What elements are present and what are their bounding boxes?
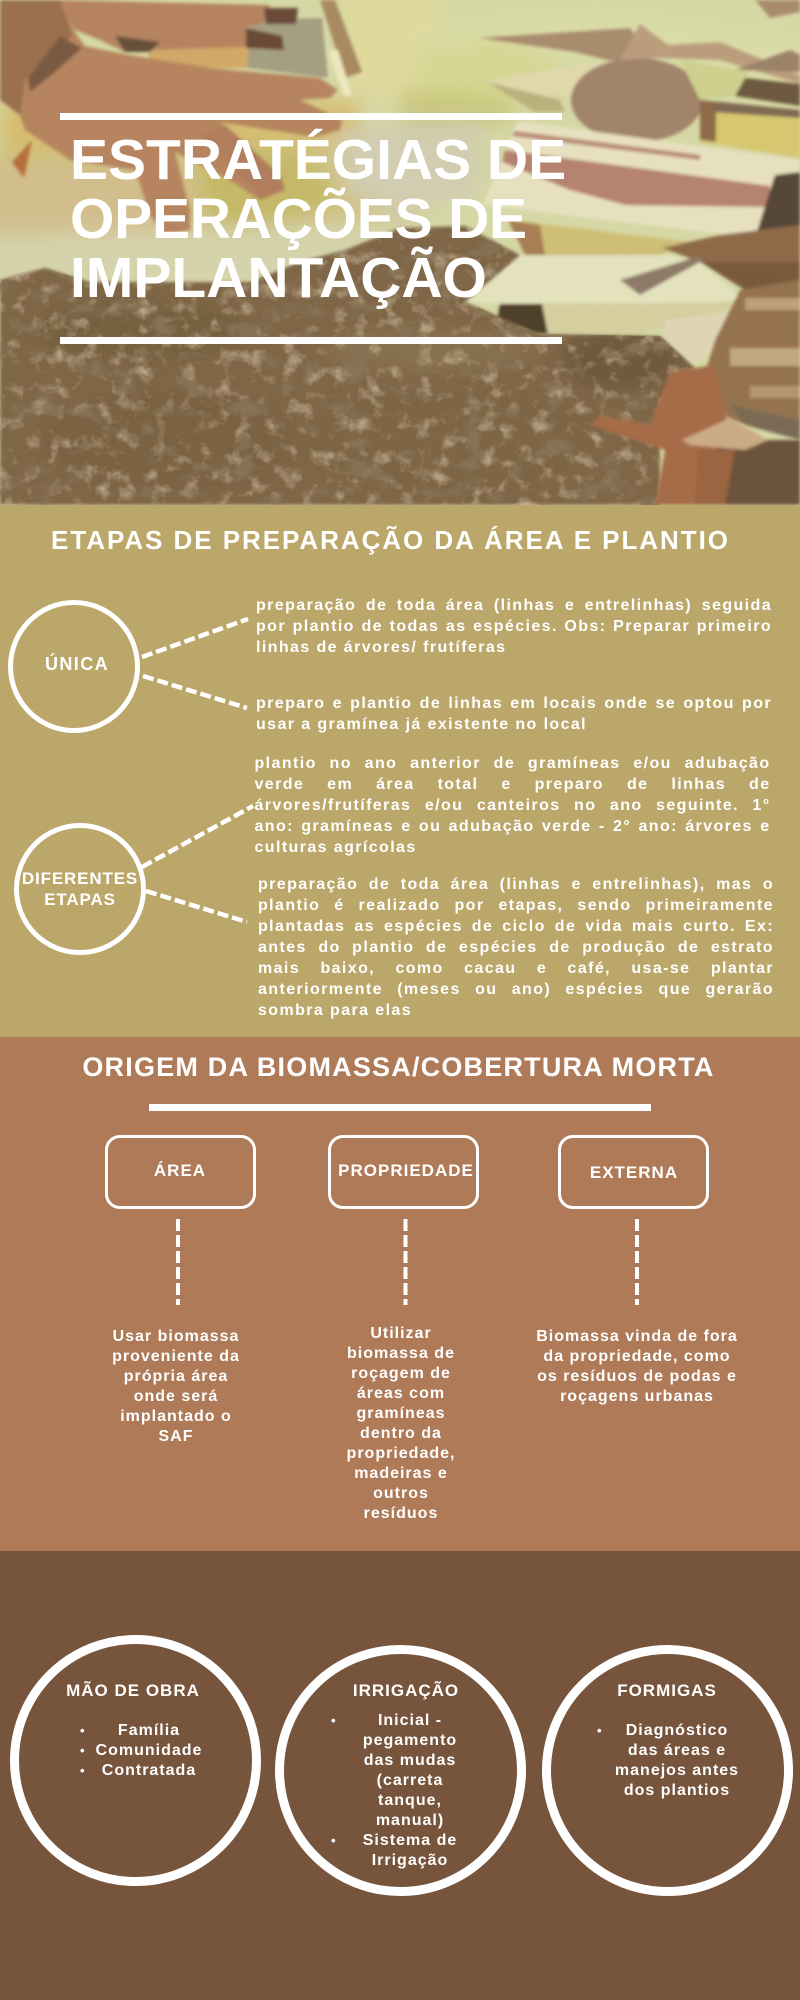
palm trunk bbox=[700, 280, 800, 440]
text: externa: roçagens urbanas bbox=[560, 1388, 714, 1405]
list: irrigação: Irrigação bbox=[372, 1852, 448, 1869]
text: propriedade: dentro da bbox=[360, 1425, 442, 1442]
text: área: SAF bbox=[158, 1428, 194, 1445]
text: propriedade: Utilizar bbox=[370, 1325, 432, 1342]
dashed connectors bbox=[141, 616, 254, 924]
lower stem bbox=[465, 255, 745, 303]
list: formigas: Diagnóstico bbox=[626, 1722, 728, 1739]
text: propriedade: roçagem de bbox=[351, 1365, 451, 1382]
title: ESTRATÉGIAS DE bbox=[70, 128, 566, 192]
red fibers bbox=[590, 365, 735, 505]
text: preparação por etapas: anteriormente (meses ou ano) espécies que gerarão bbox=[258, 981, 774, 998]
circle: única bbox=[8, 600, 140, 733]
text: propriedade: resíduos bbox=[364, 1505, 438, 1522]
list: irrigação: (carreta bbox=[377, 1772, 443, 1789]
list: irrigação: pegamento bbox=[363, 1732, 457, 1749]
label: externa: EXTERNA bbox=[590, 1163, 678, 1182]
bullets: irrigação bbox=[331, 1713, 336, 1848]
list: mão de obra bbox=[96, 1722, 202, 1779]
title bbox=[70, 128, 566, 310]
text: externa: Biomassa vinda de fora bbox=[536, 1328, 738, 1345]
list: mão de obra: Comunidade bbox=[96, 1742, 202, 1759]
striped stem bbox=[483, 121, 800, 240]
text: preparação por etapas: mais baixo, como cacau e café, usa-se plantar bbox=[258, 960, 774, 977]
panel: mão de obra, irrigação, formigas bbox=[0, 1551, 800, 2000]
bullets: irrigação: • bbox=[331, 1713, 336, 1728]
list: formigas: dos plantios bbox=[624, 1782, 730, 1799]
text: preparação de toda área: por plantio de todas as espécies. Obs: Preparar primeiro bbox=[256, 618, 772, 635]
heading: etapas: ETAPAS DE PREPARAÇÃO DA ÁREA E PLANTIO bbox=[51, 525, 730, 555]
title bottom rule bbox=[60, 337, 562, 344]
heading rule bbox=[149, 1104, 651, 1111]
circle: mão de obra bbox=[10, 1635, 261, 1886]
circle: diferentes etapas bbox=[14, 823, 146, 955]
title top rule bbox=[60, 113, 562, 120]
text: preparação por etapas bbox=[258, 876, 774, 1019]
label: única: ÚNICA bbox=[45, 654, 109, 674]
soft leaf background bbox=[0, 100, 360, 160]
text: preparação por etapas: plantio é realizado por etapas, sendo primeiramente bbox=[258, 897, 774, 914]
text: plantio no ano anterior: culturas agrícolas bbox=[254, 839, 417, 856]
text: propriedade: gramíneas bbox=[356, 1405, 446, 1422]
list: irrigação: das mudas bbox=[364, 1752, 456, 1769]
text: preparação por etapas: sombra para elas bbox=[258, 1002, 412, 1019]
text: propriedade: madeiras e bbox=[354, 1465, 448, 1482]
text: preparação por etapas: antes do plantio de espécies de produção de estrato bbox=[258, 939, 774, 956]
text: plantio no ano anterior: plantio no ano anterior de gramíneas e/ou adubação bbox=[254, 755, 770, 772]
text: preparação de toda área bbox=[256, 597, 772, 656]
panel: etapas de preparação bbox=[0, 505, 800, 1037]
text: plantio no ano anterior bbox=[254, 755, 770, 856]
heading: mão de obra: MÃO DE OBRA bbox=[66, 1681, 200, 1700]
text: externa: da propriedade, como bbox=[543, 1348, 731, 1365]
text: preparo e plantio de linhas bbox=[256, 695, 772, 733]
text: preparação de toda área: preparação de toda área (linhas e entrelinhas) seguida bbox=[256, 597, 772, 614]
text: propriedade: biomassa de bbox=[347, 1345, 455, 1362]
hands bbox=[58, 0, 282, 52]
dark object at end of stem bbox=[755, 172, 800, 238]
broken fibers bbox=[662, 225, 800, 262]
label: diferentes etapas: DIFERENTES bbox=[22, 869, 138, 888]
list: irrigação: tanque, bbox=[378, 1792, 442, 1809]
bullet: formigas: • bbox=[597, 1723, 602, 1738]
text: propriedade: outros bbox=[373, 1485, 429, 1502]
bullets: mão de obra: • bbox=[80, 1763, 85, 1778]
panel: hero photo with title bbox=[0, 0, 800, 505]
text: preparação por etapas: preparação de toda área (linhas e entrelinhas), mas o bbox=[258, 876, 774, 893]
text: área: proveniente da bbox=[112, 1348, 240, 1365]
list: formigas bbox=[615, 1722, 739, 1799]
label: propriedade: PROPRIEDADE bbox=[338, 1161, 474, 1180]
circle: irrigação bbox=[275, 1645, 526, 1896]
list: formigas: das áreas e bbox=[628, 1742, 726, 1759]
heading: origem da biomassa: ORIGEM DA BIOMASSA/COBERTURA MORTA bbox=[82, 1052, 715, 1082]
heading: irrigação: IRRIGAÇÃO bbox=[353, 1681, 459, 1700]
text: propriedade: áreas com bbox=[357, 1385, 445, 1402]
text: área: implantado o bbox=[120, 1408, 232, 1425]
text: externa: os resíduos de podas e bbox=[537, 1368, 737, 1385]
box: área bbox=[104, 1135, 256, 1209]
list: irrigação: Sistema de bbox=[363, 1832, 457, 1849]
text: propriedade bbox=[347, 1325, 455, 1522]
text: área: onde será bbox=[134, 1388, 218, 1405]
bullets: irrigação: • bbox=[331, 1833, 336, 1848]
panel: origem da biomassa bbox=[0, 1037, 800, 1551]
text: externa bbox=[536, 1328, 738, 1405]
text: propriedade: propriedade, bbox=[347, 1445, 455, 1462]
list: mão de obra: Contratada bbox=[102, 1762, 196, 1779]
text: área bbox=[112, 1328, 240, 1445]
list: irrigação: manual) bbox=[376, 1812, 444, 1829]
label: área: ÁREA bbox=[154, 1161, 206, 1180]
title: OPERAÇÕES DE bbox=[70, 187, 527, 251]
box: externa bbox=[558, 1135, 709, 1209]
list: formigas: manejos antes bbox=[615, 1762, 739, 1779]
list: irrigação bbox=[363, 1712, 457, 1869]
text: preparo e plantio de linhas: usar a gramínea já existente no local bbox=[256, 716, 587, 733]
label: diferentes etapas bbox=[22, 869, 138, 909]
text: área: própria área bbox=[124, 1368, 228, 1385]
text: plantio no ano anterior: ano: gramíneas e ou adubação verde - 2° ano: árvores e bbox=[254, 818, 770, 835]
text: área: Usar biomassa bbox=[113, 1328, 239, 1345]
list: irrigação: Inicial - bbox=[378, 1712, 442, 1729]
text: plantio no ano anterior: verde em área total e preparo de linhas de bbox=[254, 776, 770, 793]
circle: formigas bbox=[542, 1645, 793, 1896]
text: preparo e plantio de linhas: preparo e plantio de linhas em locais onde se optou por bbox=[256, 695, 772, 712]
heading: formigas: FORMIGAS bbox=[617, 1681, 717, 1700]
label: diferentes etapas: ETAPAS bbox=[44, 890, 116, 909]
list: mão de obra: Família bbox=[118, 1722, 180, 1739]
bullets: mão de obra: • bbox=[80, 1743, 85, 1758]
dashed connectors bbox=[176, 1219, 639, 1305]
box: propriedade bbox=[328, 1135, 479, 1209]
text: preparação por etapas: plantadas as espécies de ciclo de vida mais curto. Ex: bbox=[258, 918, 774, 935]
text: preparação de toda área: linhas de árvores/ frutíferas bbox=[256, 639, 506, 656]
title: IMPLANTAÇÃO bbox=[70, 246, 487, 310]
bullets: mão de obra bbox=[80, 1723, 85, 1778]
bullets: mão de obra: • bbox=[80, 1723, 85, 1738]
text: plantio no ano anterior: árvores/frutíferas e/ou canteiros no ano seguinte. 1° bbox=[254, 797, 770, 814]
photo illustration: hands over soil and banana stems bbox=[0, 0, 800, 505]
